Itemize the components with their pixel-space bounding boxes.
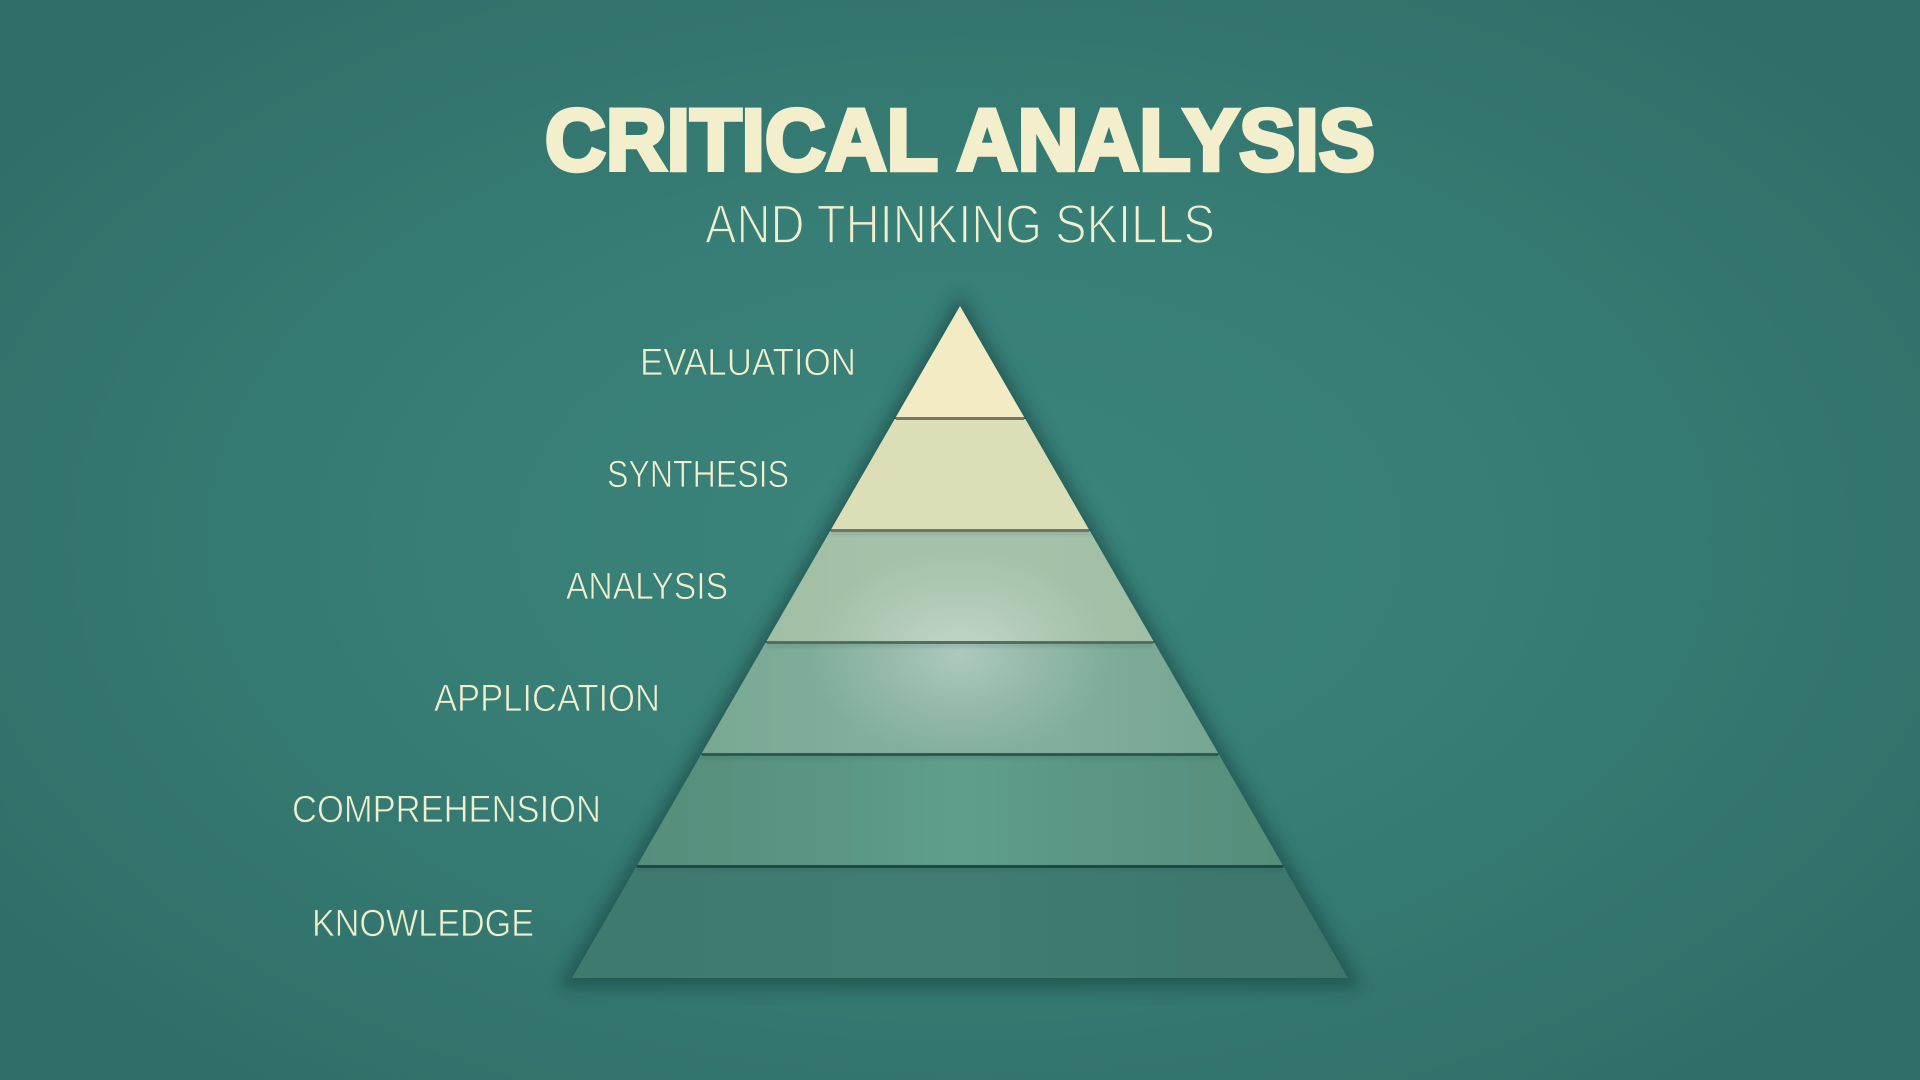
pyramid bbox=[558, 294, 1362, 988]
pyramid drop shadow bbox=[558, 294, 1362, 988]
level 6: knowledge bbox=[572, 867, 1348, 978]
label: comprehension: COMPREHENSION bbox=[292, 789, 601, 831]
divider shadows bbox=[637, 417, 1283, 871]
level 2: synthesis bbox=[831, 419, 1089, 529]
level 5: comprehension bbox=[637, 755, 1283, 865]
label: application: APPLICATION bbox=[434, 678, 660, 720]
label: knowledge: KNOWLEDGE bbox=[312, 903, 534, 945]
level 4: application bbox=[702, 643, 1218, 753]
level 3: analysis bbox=[767, 531, 1153, 641]
label: synthesis: SYNTHESIS bbox=[607, 454, 789, 496]
center glow bbox=[844, 582, 1076, 736]
label: evaluation: EVALUATION bbox=[640, 342, 856, 384]
title: CRITICAL ANALYSIS bbox=[545, 92, 1375, 189]
subtitle: AND THINKING SKILLS bbox=[705, 193, 1215, 255]
level 1: evaluation bbox=[896, 306, 1024, 417]
label: analysis: ANALYSIS bbox=[566, 566, 728, 608]
